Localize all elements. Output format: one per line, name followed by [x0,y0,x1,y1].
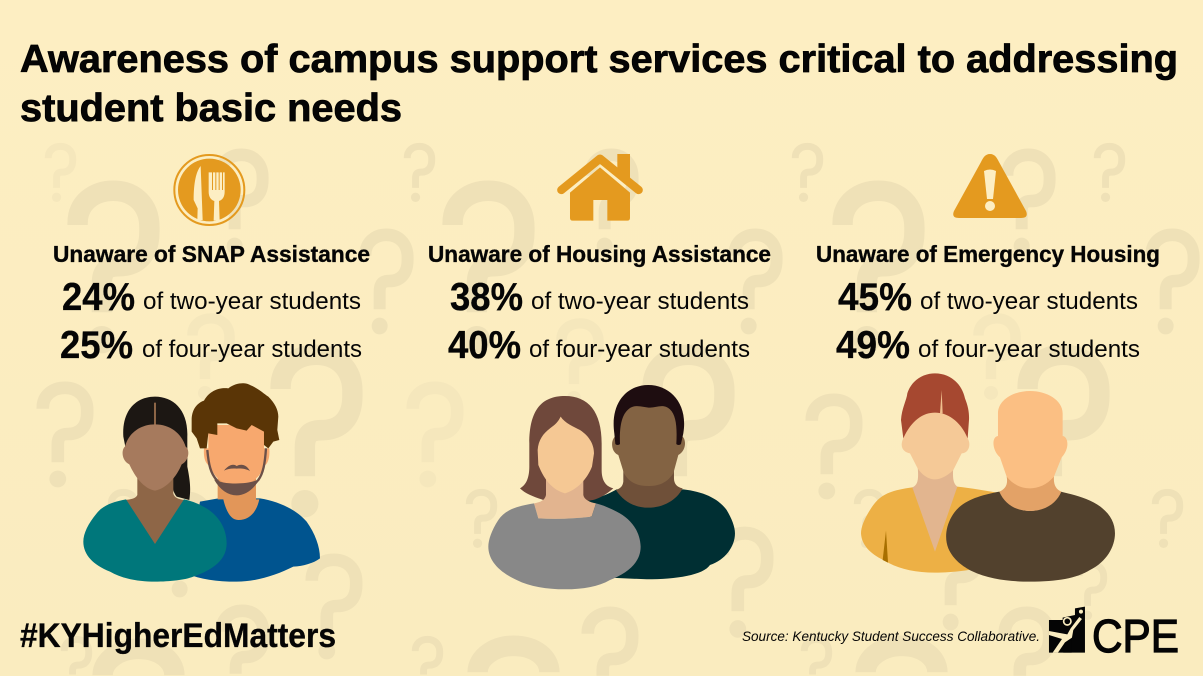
stat: housing four-year [448,324,750,367]
panel: SNAP assistance [53,241,370,582]
stat: SNAP two-year: 24% [62,276,135,319]
faint background question marks [48,146,1016,487]
icon: house [561,154,639,221]
stat: emergency four-year: of four-year students [918,336,1140,363]
stat: SNAP four-year: 25% [60,324,133,367]
title: student basic needs [20,87,402,130]
stat: housing two-year: of two-year students [531,288,749,315]
logo: CPE [1049,607,1179,662]
panel: emergency housing [816,241,1160,582]
logo mark [1049,607,1085,653]
icon: warning triangle [953,154,1027,218]
stat: housing four-year: of four-year students [529,336,750,363]
stat: emergency two-year [838,276,1138,319]
logo text: CPE [1092,610,1179,662]
panel: housing assistance [428,241,771,589]
stat: emergency two-year: 45% [838,276,912,319]
title [20,38,1178,130]
icon: fork and knife [174,155,244,225]
heading: emergency: Unaware of Emergency Housing [816,241,1160,267]
stat: housing two-year: 38% [450,276,523,319]
stat: housing two-year [450,276,749,319]
stat: SNAP two-year: of two-year students [143,288,361,315]
stat: SNAP four-year [60,324,362,367]
stat: SNAP four-year: of four-year students [142,336,362,363]
stat: SNAP two-year [62,276,361,319]
illustration: two students SNAP [83,383,320,582]
illustration: two students housing [488,385,735,589]
stat: emergency two-year: of two-year students [920,288,1138,315]
stat: emergency four-year [836,324,1140,367]
stat: housing four-year: 40% [448,324,521,367]
illustration: two students emergency [861,373,1115,582]
stat: emergency four-year: 49% [836,324,910,367]
hashtag: #KYHigherEdMatters [20,617,336,655]
heading: SNAP: Unaware of SNAP Assistance [53,241,370,267]
background question marks [43,146,1194,676]
heading: housing: Unaware of Housing Assistance [428,241,771,267]
title: Awareness of campus support services critical to addressing [20,38,1178,81]
source note: Source: Kentucky Student Success Collaborative. [742,628,1040,644]
